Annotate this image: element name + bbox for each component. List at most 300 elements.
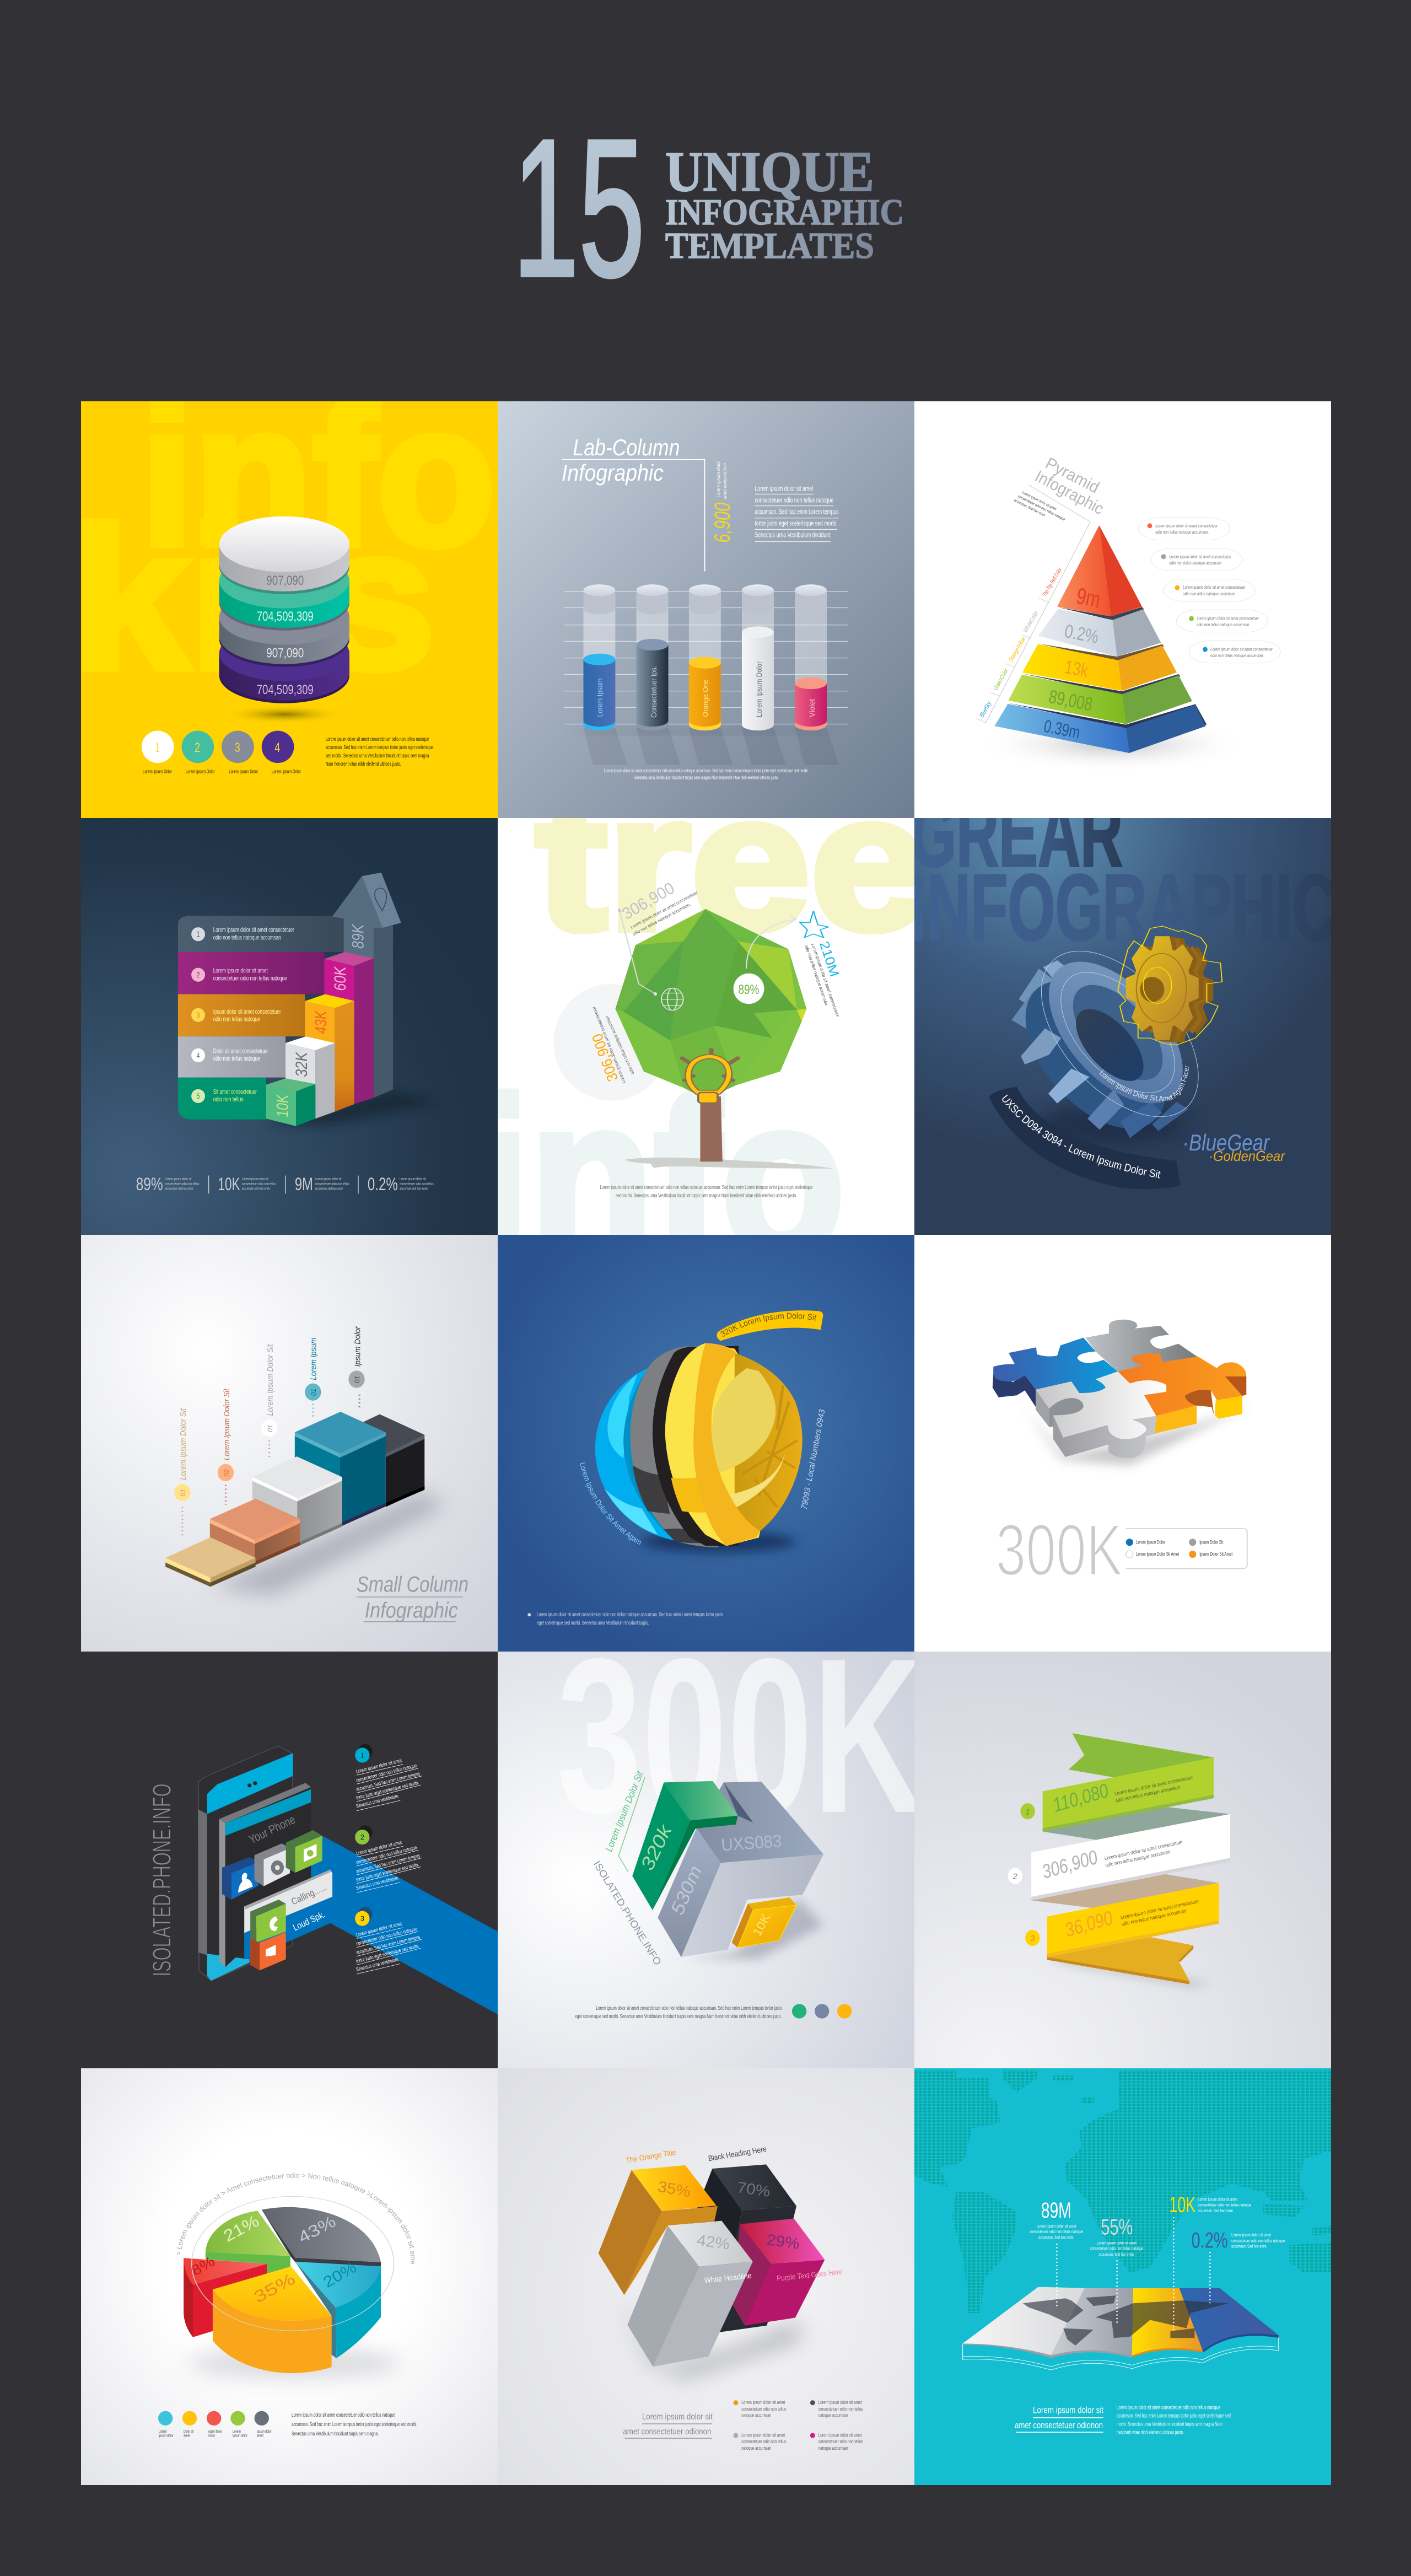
banner text: UXSC D094 3094 - Lorem Ipsum Dolor Sit	[1002, 1095, 1161, 1179]
pie legend: Ipsum dolor	[159, 2434, 174, 2438]
orange block	[599, 2165, 718, 2295]
heading lab-column infographic	[562, 434, 680, 486]
callout pills: Lorem ipsum dolor sit amet consectetuer	[1155, 523, 1218, 528]
pie legend: Lorem	[233, 2430, 241, 2434]
loud speaker bar	[244, 1897, 332, 1959]
badges: 01	[353, 1376, 361, 1383]
puzzle piece white	[1036, 1372, 1166, 1439]
callout pills: odio non tellus natoque accumsan.	[1183, 591, 1236, 596]
legend notes: consectetuer odio non tellus	[818, 2406, 863, 2412]
stat 10K: Lorem ipsum dolor sit amet	[1198, 2196, 1238, 2202]
heading lab-column infographic: Lab-Column	[573, 434, 680, 460]
callout pills	[1138, 518, 1280, 663]
column 43K: 43K	[312, 1010, 330, 1034]
bottom statistics row: 10K	[218, 1174, 240, 1194]
column 43K	[305, 994, 354, 1112]
icon: star	[800, 911, 828, 938]
row badges: 4	[197, 1051, 200, 1060]
black block: 70%	[736, 2179, 771, 2200]
heading lab-column infographic: Infographic	[562, 460, 664, 486]
orange bar	[210, 1499, 300, 1566]
white block: 42%	[696, 2231, 731, 2253]
underlined text list: Senectus urna Vestibulum tincidunt	[755, 530, 831, 539]
white bar	[252, 1456, 342, 1545]
description text: Lorem ipsum dolor sit amet consectetuer odio non tellus natoque	[326, 736, 429, 743]
slice red 8%	[184, 2252, 267, 2337]
value 530m: 530m	[667, 1863, 707, 1918]
callout 306,900 grey: Lorem ipsum dolor sit amet consectetuer	[629, 890, 699, 930]
numbered badges	[1008, 1803, 1040, 1946]
stat 0.2%: accumsan. Sed hac enim.	[1231, 2244, 1267, 2249]
stat 55%: consectetuer odio non tellus natoque	[1090, 2246, 1144, 2251]
block titles: White Headline	[704, 2271, 752, 2285]
stat 6,900	[710, 461, 735, 543]
legend circles	[142, 731, 301, 775]
band 306,900: 306,900	[1039, 1846, 1100, 1883]
vertical title: ISOLATED.PHONE.INFO	[148, 1783, 176, 1976]
disc values: 907,090	[266, 646, 304, 661]
step 3 text block: tortor justo eget scelerisque sed morbi.	[356, 1943, 419, 1965]
column 4 white: Lorem Ipsum Dolor	[755, 662, 763, 717]
bar labels: Lorem Ipsum Dolor Sit	[222, 1388, 231, 1460]
stat 55%: accumsan. Sed hac enim.	[1098, 2252, 1134, 2257]
description text: Senectus urna Vestibulum tincidunt turpis sem magna.	[292, 2431, 379, 2437]
badges: 01	[179, 1489, 187, 1497]
book map faces	[962, 2287, 1279, 2355]
pyramid layer yellow	[1022, 643, 1177, 691]
stat 0.2%: consectetuer odio non tellus natoque	[1231, 2238, 1285, 2243]
slice cyan 20%: 20%	[320, 2258, 359, 2291]
legend notes: consectetuer odio non tellus	[741, 2406, 786, 2412]
arc text left: Lorem Ipsum Dolor Sit Amet Agam	[580, 1462, 642, 1545]
gear legend labels: ·BlueGear	[1182, 1130, 1270, 1155]
dotted leaders	[182, 1395, 359, 1538]
book pages outline	[962, 2335, 1279, 2370]
legend circles: 4	[274, 740, 280, 755]
caption: Lorem ipsum dolor sit amet consectetuer odio non tellus natoque accumsan. Sed hac enim Lorem tempus tortor justo eget scelerisque	[600, 1185, 813, 1191]
column 60K	[324, 952, 374, 1104]
row texts: Lorem ipsum dolor sit amet consectetuer	[213, 926, 294, 934]
golden gear	[1118, 926, 1222, 1045]
row texts: Dolor sit amet consectetuer	[213, 1047, 268, 1055]
app tile phone	[250, 1900, 286, 1943]
phone label your phone: Your Phone	[247, 1813, 297, 1847]
description text: accumsan. Sed hac enim Lorem tempus tortor justo eget scelerisque	[326, 745, 434, 751]
colour labels	[978, 566, 1064, 718]
pie shadow	[189, 2346, 399, 2380]
description text	[1117, 2405, 1231, 2436]
globe blue slice	[595, 1358, 686, 1542]
row badges	[191, 927, 205, 1103]
pie legend: Ipsum dolor	[233, 2434, 247, 2438]
band 36,090: 36,090	[1062, 1906, 1115, 1942]
slice orange 35%	[213, 2266, 332, 2373]
pie legend: amet	[257, 2434, 263, 2438]
band 110,080	[1043, 1757, 1214, 1832]
slice red 8%: 8%	[189, 2252, 218, 2279]
disc values: 907,090	[266, 573, 304, 588]
step 3 text block: Senectus urna vestibulum.	[356, 1956, 400, 1973]
bottom statistics row: Lorem ipsum dolor sit	[165, 1177, 191, 1181]
panel: 3D blocks	[498, 2068, 914, 2485]
side title: ISOLATED.PHONE.INFO	[591, 1859, 664, 1967]
pyramid layer red	[1057, 525, 1142, 616]
caption: eget scelerisque sed morbi. Senectus urna Vestibulum tincidunt turpis.	[537, 1620, 649, 1626]
description text: Lorem ipsum dolor sit amet consectetuer odio non tellus natoque	[292, 2412, 395, 2418]
panel: world map book	[914, 2068, 1331, 2485]
row texts: consectetuer odio non tellus natoque	[213, 974, 287, 982]
row texts: Lorem ipsum dolor sit amet	[213, 967, 268, 975]
pink block	[732, 2219, 825, 2326]
stat 89M: consectetuer odio non tellus natoque	[1030, 2229, 1083, 2234]
bottom statistics row: accumsan sed hac enim	[400, 1187, 428, 1191]
legend notes: Lorem ipsum dolor sit amet	[741, 2433, 785, 2439]
background word info: info	[140, 363, 496, 588]
ribbon tail green	[1069, 1733, 1214, 1777]
column 4 white	[742, 584, 774, 730]
title line templates: TEMPLATES	[665, 225, 874, 266]
caption	[600, 1185, 813, 1199]
bottom statistics row: accumsan sed hac enim	[165, 1187, 193, 1191]
row badges: 3	[197, 1010, 200, 1019]
curved banner	[989, 1087, 1181, 1189]
arrow column 89K	[332, 873, 401, 1098]
value UXS083: UXS083	[720, 1831, 783, 1855]
band 110,080: Lorem ipsum dolor sit amet consectetuer	[1114, 1774, 1193, 1797]
callout 306,900 grey	[619, 879, 699, 937]
green block	[632, 1781, 738, 1910]
badge 89% with arrow	[734, 916, 796, 1004]
dotted world map	[914, 2070, 1331, 2313]
bottom statistics row	[136, 1174, 434, 1194]
caption: sed morbi. Senectus urna Vestibulum tincidunt turpis sem magna Nam hendrerit vitae nibh eleifend ultrices justo.	[616, 1193, 797, 1199]
legend box: Lorem Ipsum Dolor	[1136, 1539, 1165, 1545]
legend notes: natoque accumsan	[818, 2412, 848, 2418]
row texts: Ipsum dolor sit amet consectetuer	[213, 1008, 281, 1015]
panel: 3D pie chart	[0, 0, 498, 2485]
pyramid bracket line	[976, 485, 1090, 723]
caption heading: amet consectetuer odionon	[623, 2427, 711, 2437]
caption: Lorem ipsum dolor sit amet consectetuer odio non tellus natoque accumsan. Sed hac enim Lorem tempus tortor justo	[537, 1612, 723, 1618]
description text: Lorem ipsum dolor sit amet consectetuer odio non tellus natoque	[1117, 2405, 1220, 2411]
pyramid layer green	[1008, 674, 1192, 724]
step 3 text block: Lorem ipsum dolor sit amet	[356, 1921, 403, 1938]
pyramid heading: Pyramid	[1042, 454, 1102, 497]
tree trunk	[700, 1096, 723, 1161]
pie outer ring	[192, 2196, 394, 2331]
column 32K	[286, 1036, 335, 1118]
pink block: 29%	[766, 2231, 801, 2252]
panel: sliced globe	[498, 1235, 914, 1652]
underlined text list: consectetuer odio non tellus natoque	[755, 496, 833, 504]
title line unique: UNIQUE	[665, 140, 874, 203]
grey cube left face	[658, 1828, 721, 1957]
black bar	[363, 1415, 424, 1507]
bar labels	[179, 1326, 363, 1480]
panel: stacked discs on yellow	[81, 401, 498, 818]
caption	[527, 1612, 723, 1626]
value 320k: 320k	[637, 1821, 677, 1874]
colour labels: GreenColor	[992, 667, 1010, 692]
description text: sed morbi. Senectus urna Vestibulum tincidunt turpis sem magna	[326, 753, 429, 759]
stat 89M: accumsan. Sed hac enim.	[1038, 2234, 1074, 2240]
panel: pyramid infographic	[914, 401, 1331, 818]
bar labels: Ipsum Dolor	[353, 1326, 363, 1367]
stat 6,900: amet consectetuer	[722, 463, 728, 499]
pyramid note: consectetuer odio non tellus natoque	[1017, 494, 1065, 521]
callout pills: odio non tellus natoque accumsan.	[1197, 622, 1250, 627]
pie legend: Agam facer	[208, 2430, 222, 2434]
legend notes: consectetuer odio non tellus	[741, 2439, 786, 2445]
legend circles: 1	[155, 740, 159, 755]
callout pills: odio non tellus natoque accumsan.	[1155, 529, 1209, 535]
column 3 orange	[689, 584, 721, 730]
row texts: Sit amet consectetuer	[213, 1088, 257, 1095]
stat 6,900: 6,900	[710, 503, 735, 543]
puzzle piece grey	[1085, 1320, 1198, 1372]
pie legend	[158, 2411, 272, 2438]
badges	[174, 1370, 365, 1501]
row badges: 2	[197, 970, 200, 979]
legend notes: consectetuer odio non tellus	[818, 2439, 863, 2445]
slice grey 43%	[262, 2207, 381, 2266]
book rim	[962, 2343, 1132, 2357]
colour labels: The Top Red Color	[1042, 566, 1064, 598]
pyramid layer red: 9m	[1074, 583, 1103, 612]
callout 306,900 orange: odio non tellus natoque accumsan.	[603, 1014, 636, 1075]
ribbon text: 320K Lorem Ipsum Dolor Sit	[720, 1313, 817, 1337]
background word 300K: 300K	[557, 1612, 923, 1859]
puzzle piece blue	[993, 1337, 1118, 1393]
blue light beam	[286, 1830, 498, 2014]
arrow column 89K: 89K	[349, 923, 368, 949]
panel: rising bars with arrow	[81, 818, 498, 1235]
legend notes: natoque accumsan	[741, 2412, 771, 2418]
pie legend: Lorem	[159, 2430, 167, 2434]
underlined text list: accumsan. Sed hac enim Lorem tempus	[755, 508, 839, 516]
step 3 text block: accumsan. Sed hac enim Lorem tempus	[356, 1934, 421, 1956]
bottom statistics row: Lorem ipsum dolor sit	[315, 1177, 342, 1181]
caption heading	[623, 2412, 713, 2438]
row badges: 1	[197, 929, 200, 938]
pie legend: amet	[184, 2434, 190, 2438]
step 3 text block: 3	[360, 1914, 364, 1923]
underlined text list: tortor justo eget scelerisque sed morbi.	[755, 519, 837, 527]
tan bar	[165, 1537, 256, 1587]
slice cyan 20%	[295, 2258, 381, 2358]
column 10K: 10K	[273, 1094, 292, 1117]
stat 10K	[1169, 2193, 1251, 2217]
column 60K: 60K	[331, 966, 349, 991]
bar shadows	[266, 1091, 435, 1126]
numbered badges: 2	[1013, 1872, 1018, 1881]
band 36,090: odio non tellus natoque accumsan.	[1121, 1908, 1188, 1928]
description text: accumsan. Sed hac enim Lorem tempus tortor justo eget scelerisque sed	[1117, 2413, 1231, 2419]
step 1 text block: Senectus urna vestibulum.	[356, 1793, 400, 1810]
description text: Nam hendrerit vitae nibh eleifend ultrices justo.	[326, 761, 401, 767]
bar labels: Lorem Ipsum Dolor Sit	[266, 1344, 275, 1416]
step 3 text block: consectetuer odio non tellus natoque	[356, 1926, 417, 1947]
pie legend: Ipsum dolor	[257, 2430, 272, 2434]
caption heading	[1015, 2405, 1103, 2432]
legend notes: natoque accumsan	[818, 2445, 848, 2451]
column 5 pink	[795, 584, 827, 730]
title line infographic: INFOGRAPHIC	[665, 192, 904, 233]
grey circle	[553, 984, 669, 1100]
row texts: odio non tellus natoque accumsan	[213, 933, 281, 941]
column 5 pink: Violet	[807, 699, 816, 717]
column 2 dark	[637, 584, 668, 730]
bottom statistics row: accumsan sed hac enim	[315, 1187, 343, 1191]
icon: light bulb	[682, 1050, 738, 1103]
callout 306,900 orange: 306,900	[589, 1031, 621, 1084]
band 306,900: odio non tellus natoque accumsan.	[1105, 1849, 1172, 1869]
stat 55%	[1090, 2215, 1144, 2257]
band 36,090	[1047, 1883, 1219, 1957]
stat 6,900: Lorem ipsum dolor	[715, 461, 721, 497]
legend box	[1126, 1529, 1247, 1569]
caption	[604, 768, 809, 781]
bottom statistics row: consectetuer odio non tellus	[400, 1182, 434, 1186]
yellow block	[732, 1897, 796, 1948]
callout 306,900 orange: Lorem ipsum dolor sit amet consectetuer	[591, 1005, 627, 1084]
legend notes: natoque accumsan	[741, 2445, 771, 2451]
stat 89M: Lorem ipsum dolor sit amet	[1037, 2223, 1076, 2229]
bottom statistics row: 9M	[295, 1174, 313, 1194]
stat 10K: accumsan. Sed hac enim.	[1198, 2208, 1234, 2213]
title: 15 unique infographic templates	[513, 99, 904, 318]
stat 89M: 89M	[1041, 2198, 1071, 2223]
yellow ribbon	[717, 1310, 823, 1341]
callout pills: Lorem ipsum dolor sit amet consectetuer	[1210, 647, 1273, 652]
block titles: The Orange Title	[625, 2148, 677, 2165]
icon: globe with leader line	[618, 908, 683, 1010]
heading small column infographic	[357, 1572, 468, 1622]
teal bar	[295, 1412, 386, 1526]
stat 55%: Lorem ipsum dolor sit amet	[1097, 2240, 1137, 2246]
description text: accumsan. Sed hac enim Lorem tempus tortor justo eget scelerisque sed morbi.	[292, 2422, 417, 2428]
caption heading: Lorem ipsum dolor sit	[642, 2412, 713, 2422]
row texts	[213, 926, 294, 1103]
step 1 text block: 1	[361, 1751, 364, 1759]
yellow block: 10K	[750, 1911, 773, 1938]
underlined text list: Lorem ipsum dolor sit amet	[755, 484, 814, 492]
callout 306,900 grey: odio non tellus natoque accumsan.	[632, 901, 692, 937]
step 2 text block	[355, 1825, 422, 1892]
disc stack chart	[142, 517, 434, 775]
calling bar	[244, 1870, 332, 1934]
hole shade orange	[1184, 1390, 1214, 1416]
bottom statistics row: 89%	[136, 1174, 163, 1194]
tree shadow	[624, 1158, 833, 1169]
low poly tree crown	[615, 909, 806, 1099]
black block	[678, 2164, 796, 2332]
disc values	[257, 573, 314, 697]
bar labels: Lorem Ipsum Dolor Sit	[179, 1408, 188, 1480]
underlined text list	[755, 484, 839, 542]
legend notes: Lorem ipsum dolor sit amet	[818, 2400, 862, 2406]
description text	[292, 2412, 417, 2437]
caption: Senectus urna Vestibulum tincidunt turpis sem magna Nam hendrerit vitae nibh eleifend ultrices justo.	[634, 775, 778, 781]
numbered badges: 1	[1025, 1807, 1030, 1816]
badge 89% with arrow: 89%	[738, 982, 759, 997]
slice orange 35%: 35%	[251, 2270, 298, 2306]
step 2 text block: Lorem ipsum dolor sit amet	[356, 1840, 403, 1857]
phone body	[198, 1746, 311, 1981]
legend circles: Lorem Ipsum Dolor	[186, 769, 215, 775]
colour labels: BlueSky	[978, 700, 993, 718]
background word tree: tree	[536, 755, 930, 970]
arc labels: > Lorem ipsum dolor sit > Amet consectetuer odio > Non tellus natoque >Lorem ipsum dolor sit amet	[0, 0, 417, 2265]
ribbon folds	[1031, 1806, 1230, 1908]
caption: Lorem ipsum dolor sit amet consectetuer odio non tellus natoque accumsan. Sed hac enim Lorem tempus tortor justo eget scelerisque sed morbi.	[604, 768, 809, 774]
pyramid note: accumsan. Sed hac enim	[1013, 498, 1046, 518]
pyramid layer green: 89,008	[1047, 686, 1094, 715]
callout 210M: Lorem ipsum dolor sit amet consectetuer	[810, 943, 841, 1018]
panel: small column infographic	[81, 1235, 498, 1652]
block shadow	[621, 2298, 799, 2381]
grey cube top	[697, 1782, 823, 1863]
legend circles: 2	[195, 740, 200, 755]
band 36,090: Lorem ipsum dolor sit amet consectetuer	[1120, 1899, 1199, 1921]
stat 10K: 10K	[1169, 2193, 1195, 2217]
title number 15: 15	[513, 99, 645, 318]
column 10K	[266, 1078, 315, 1126]
block titles: Purple Text Goes Here	[776, 2267, 843, 2283]
disc values: 704,509,309	[257, 682, 314, 697]
puzzle piece orange	[1118, 1353, 1246, 1416]
pyramid layer yellow: 13k	[1063, 657, 1090, 682]
block titles	[625, 2144, 843, 2285]
row texts: odio non tellus	[213, 1095, 244, 1103]
bar labels: Lorem Ipsum	[309, 1338, 319, 1380]
puzzle shadow	[1025, 1404, 1251, 1465]
legend circles: 3	[235, 740, 240, 755]
background word kits: kits	[72, 487, 435, 711]
stat 0.2%: 0.2%	[1192, 2229, 1228, 2253]
card rows	[178, 916, 344, 1120]
pyramid layer white: 0.2%	[1063, 621, 1100, 648]
legend notes: Lorem ipsum dolor sit amet	[818, 2433, 862, 2439]
band 110,080: odio non tellus natoque accumsan.	[1115, 1784, 1182, 1804]
globe glass hemisphere	[693, 1343, 803, 1546]
stat 55%: 55%	[1101, 2215, 1133, 2239]
band 306,900: Lorem ipsum dolor sit amet consectetuer	[1104, 1839, 1183, 1862]
band 306,900	[1031, 1814, 1230, 1900]
row badges: 5	[197, 1091, 200, 1100]
step 2 text block: 2	[360, 1833, 364, 1841]
caption: eget scelerisque sed morbi. Senectus urna Vestibulum tincidunt turpis sem magna Nam hendrerit vitae nibh eleifend ultrices justo.	[575, 2014, 782, 2020]
ribbon tail gold	[1047, 1937, 1193, 1985]
stat 0.2%: Lorem ipsum dolor sit amet	[1231, 2232, 1272, 2238]
bottom statistics row: consectetuer odio non tellus	[242, 1182, 276, 1186]
callout pills: Lorem ipsum dolor sit amet consectetuer	[1183, 584, 1246, 590]
callout pills: odio non tellus natoque accumsan.	[1210, 653, 1264, 658]
panel: gear infographic	[909, 782, 1337, 1235]
ribbon shadow	[1047, 1959, 1211, 1986]
heading small column infographic: Infographic	[365, 1598, 458, 1622]
disc values: 704,509,309	[257, 609, 314, 624]
caption heading: Lorem ipsum dolor sit	[1033, 2405, 1103, 2415]
bottom statistics row: Lorem ipsum dolor sit	[400, 1177, 426, 1181]
column 1 blue	[583, 584, 615, 730]
panel: puzzle infographic	[914, 1235, 1331, 1652]
green label	[603, 1770, 645, 1872]
caption: Lorem ipsum dolor sit amet consectetuer odio non tellus natoque accumsan. Sed hac enim Lorem tempus tortor justo	[596, 2005, 782, 2012]
caption	[575, 2005, 782, 2020]
panel: 300K cube	[498, 1612, 923, 2068]
pie legend: modo	[208, 2434, 215, 2438]
